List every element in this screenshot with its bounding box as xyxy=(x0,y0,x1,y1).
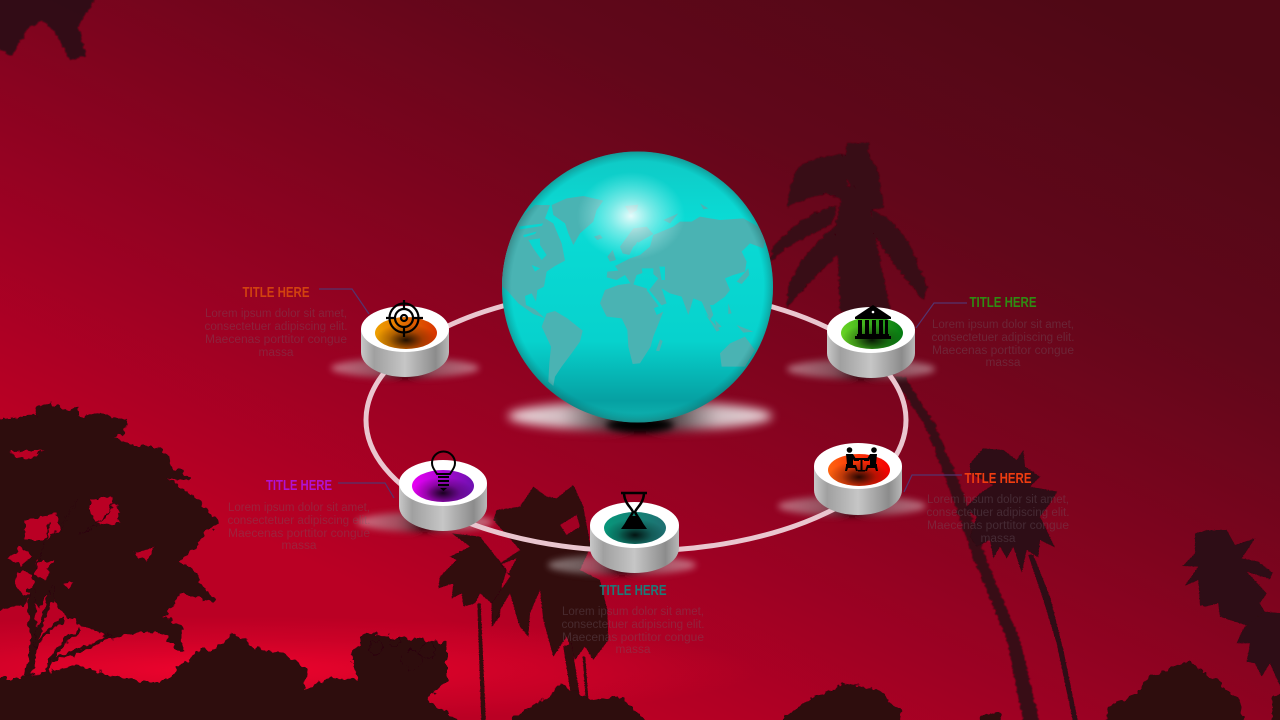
callout 1: orange: massa xyxy=(258,347,294,359)
callout 2: green: consectetuer adipiscing elit. xyxy=(932,332,1074,344)
callout 5: purple: Lorem ipsum dolor sit amet, xyxy=(228,502,370,514)
callout 4: teal: TITLE HERE xyxy=(600,582,666,599)
callout 1: orange: consectetuer adipiscing elit. xyxy=(204,321,348,333)
branches xyxy=(27,500,113,677)
globe xyxy=(493,152,773,422)
callout 5: purple xyxy=(228,477,394,552)
far right palms xyxy=(1183,530,1280,693)
callout 5: purple: TITLE HERE xyxy=(266,477,332,494)
icon: bank xyxy=(855,305,891,339)
ring connecting the discs xyxy=(366,289,906,551)
callout 1: orange: Lorem ipsum dolor sit amet, xyxy=(205,308,347,320)
icon: light bulb xyxy=(432,452,455,491)
callout 3: red: consectetuer adipiscing elit. xyxy=(926,507,1070,519)
callout 5: purple: consectetuer adipiscing elit. xyxy=(228,515,370,527)
callout 1: orange: TITLE HERE xyxy=(242,284,310,301)
callout 3: red: massa xyxy=(980,533,1016,545)
large palm xyxy=(771,143,1040,720)
callout 3: red: Lorem ipsum dolor sit amet, xyxy=(927,494,1069,506)
callout 3: red: TITLE HERE xyxy=(964,470,1032,487)
continents xyxy=(493,196,765,386)
callout 5: purple: massa xyxy=(282,540,317,552)
callout 4: teal xyxy=(562,582,704,656)
canopy xyxy=(0,402,220,652)
callout 3: red xyxy=(904,470,1070,545)
forest bottom-left xyxy=(0,633,458,720)
americas and greenland xyxy=(493,196,603,318)
left tree xyxy=(0,402,220,677)
icon: hourglass xyxy=(621,493,647,529)
globe highlight xyxy=(577,172,685,260)
icon: target xyxy=(386,300,423,337)
disc 5: light bulb, purple xyxy=(399,452,487,531)
callout 3: red: Maecenas porttitor congue xyxy=(927,520,1069,532)
callout 2: green xyxy=(916,294,1074,369)
disc 1: target, orange xyxy=(361,300,449,377)
palm right of ring xyxy=(965,448,1078,720)
callout 2: green: Maecenas porttitor congue xyxy=(932,345,1074,357)
disc 4: hourglass, teal xyxy=(590,493,679,573)
bushes bottom xyxy=(508,662,1280,720)
callout 1: orange: Maecenas porttitor congue xyxy=(205,334,347,346)
globe rim xyxy=(502,152,773,422)
centre palms xyxy=(438,485,608,720)
callout 2: green: TITLE HERE xyxy=(970,294,1036,311)
disc shadows xyxy=(331,358,935,575)
callout 4: teal: Maecenas porttitor congue xyxy=(562,632,704,644)
callout 4: teal: massa xyxy=(616,644,651,656)
palm trunk xyxy=(893,377,1040,720)
callout 4: teal: consectetuer adipiscing elit. xyxy=(562,619,704,631)
callout 1: orange xyxy=(204,284,369,359)
callout 2: green: massa xyxy=(986,357,1021,369)
globe shadow xyxy=(508,401,772,432)
icon: people at table xyxy=(845,447,878,472)
disc 3: meeting, red xyxy=(814,443,902,515)
old world xyxy=(542,203,765,386)
disc 2: bank, green xyxy=(827,305,915,378)
callout 4: teal: Lorem ipsum dolor sit amet, xyxy=(562,606,704,618)
top-left foliage xyxy=(0,0,100,60)
callout 5: purple: Maecenas porttitor congue xyxy=(228,528,370,540)
palm crown xyxy=(771,143,927,312)
callout 2: green: Lorem ipsum dolor sit amet, xyxy=(932,319,1074,331)
